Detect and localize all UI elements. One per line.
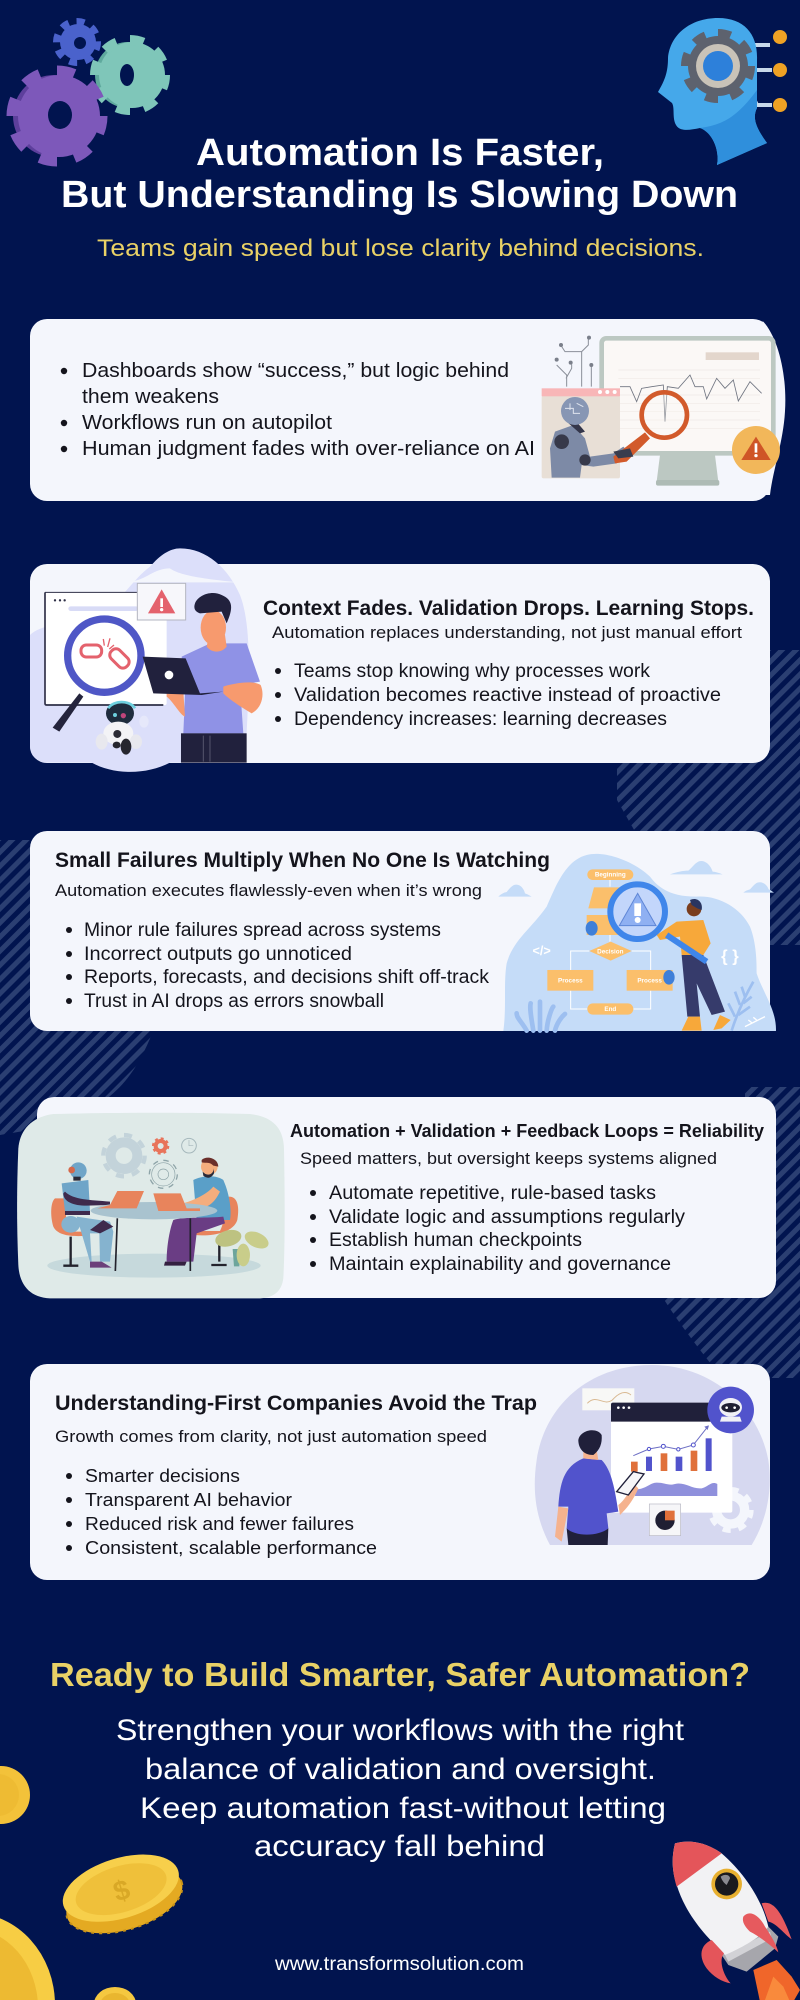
bullet list: context fades [275,661,721,730]
title: Automation Is Faster, [196,132,604,174]
bullet list: small failures: Reports, forecasts, and decisions shift off-track [84,967,490,988]
illustration: robot inspecting monitor [542,322,785,495]
bullet list: small failures: Minor rule failures spread across systems [84,920,441,941]
icon: gold coins: $ [110,1873,134,1908]
illustration: robot and man at table [17,1113,285,1298]
text block: call to action body: balance of validation and oversight. [145,1753,656,1786]
text block: call to action body: Strengthen your workflows with the right [116,1714,685,1747]
bullet list: understanding first: Consistent, scalable performance [85,1538,377,1558]
bullet list: understanding first: Reduced risk and fewer failures [85,1514,354,1534]
panel: dashboards [30,319,785,501]
bullet list: reliability: Automate repetitive, rule-based tasks [329,1183,656,1204]
bullet list: context fades: Teams stop knowing why processes work [294,661,651,682]
bullet list: dashboards [61,360,535,460]
panel: context fades [30,548,770,772]
heading: reliability: Automation + Validation + Feedback Loops = Reliability [290,1121,764,1141]
illustration: flowchart under magnifier: { } [721,947,739,966]
bullet list: reliability: Maintain explainability and governance [329,1254,671,1275]
subheading: context fades: Automation replaces understanding, not just manual effort [272,623,742,642]
subheading: small failures: Automation executes flawlessly-even when it’s wrong [55,881,482,900]
bullet list: dashboards: Workflows run on autopilot [82,412,332,434]
illustration: man reading analytics [535,1365,770,1545]
bullet list: understanding first [66,1466,377,1558]
subtitle: Teams gain speed but lose clarity behind decisions. [97,235,704,262]
bullet list: small failures: Incorrect outputs go unnoticed [84,944,352,965]
title [61,132,738,216]
heading: call to action: Ready to Build Smarter, Safer Automation? [50,1656,750,1693]
bullet list: dashboards: them weakens [82,386,219,408]
title: But Understanding Is Slowing Down [61,174,738,216]
illustration: flowchart under magnifier: </> [533,944,551,958]
illustration: flowchart under magnifier: Process [558,977,583,984]
bullet list: reliability: Validate logic and assumptions regularly [329,1207,686,1228]
bullet list: reliability [310,1183,686,1275]
bullet list: small failures: Trust in AI drops as errors snowball [84,991,384,1012]
bullet list: understanding first: Transparent AI behavior [85,1490,292,1510]
bullet list: understanding first: Smarter decisions [85,1466,240,1486]
bullet list: context fades: Validation becomes reactive instead of proactive [294,685,721,706]
illustration: flowchart under magnifier: Process [637,977,662,984]
icon: AI head with gear [658,18,787,165]
text block: call to action body [116,1714,685,1863]
illustration: flowchart under magnifier: Decision [597,949,624,956]
heading: context fades: Context Fades. Validation Drops. Learning Stops. [263,597,754,620]
text block: call to action body: accuracy fall behind [254,1830,545,1863]
bullet list: context fades: Dependency increases: learning decreases [294,709,667,730]
icon: gold coins [0,1766,190,2000]
subheading: reliability: Speed matters, but oversight keeps systems aligned [300,1149,717,1168]
illustration: flowchart under magnifier [498,854,776,1031]
bullet list: dashboards: Dashboards show “success,” but logic behind [82,360,509,382]
icon: rocket [673,1842,800,2000]
illustration: man with laptop and broken chain [30,548,263,772]
subheading: understanding first: Growth comes from clarity, not just automation speed [55,1427,487,1446]
bullet list: dashboards: Human judgment fades with over-reliance on AI [82,438,535,460]
illustration: flowchart under magnifier: End [604,1006,616,1013]
panel: reliability [17,1097,776,1298]
website url: www.transformsolution.com [274,1954,524,1975]
text block: call to action body: Keep automation fast-without letting [140,1792,666,1825]
panel: understanding first [30,1364,770,1580]
heading: small failures: Small Failures Multiply When No One Is Watching [55,849,550,872]
heading: understanding first: Understanding-First Companies Avoid the Trap [55,1392,537,1415]
bullet list: reliability: Establish human checkpoints [329,1230,582,1251]
bullet list: small failures [66,920,490,1012]
icon: gears [13,22,165,160]
panel: small failures [30,831,776,1031]
illustration: flowchart under magnifier: Beginning [595,872,626,879]
